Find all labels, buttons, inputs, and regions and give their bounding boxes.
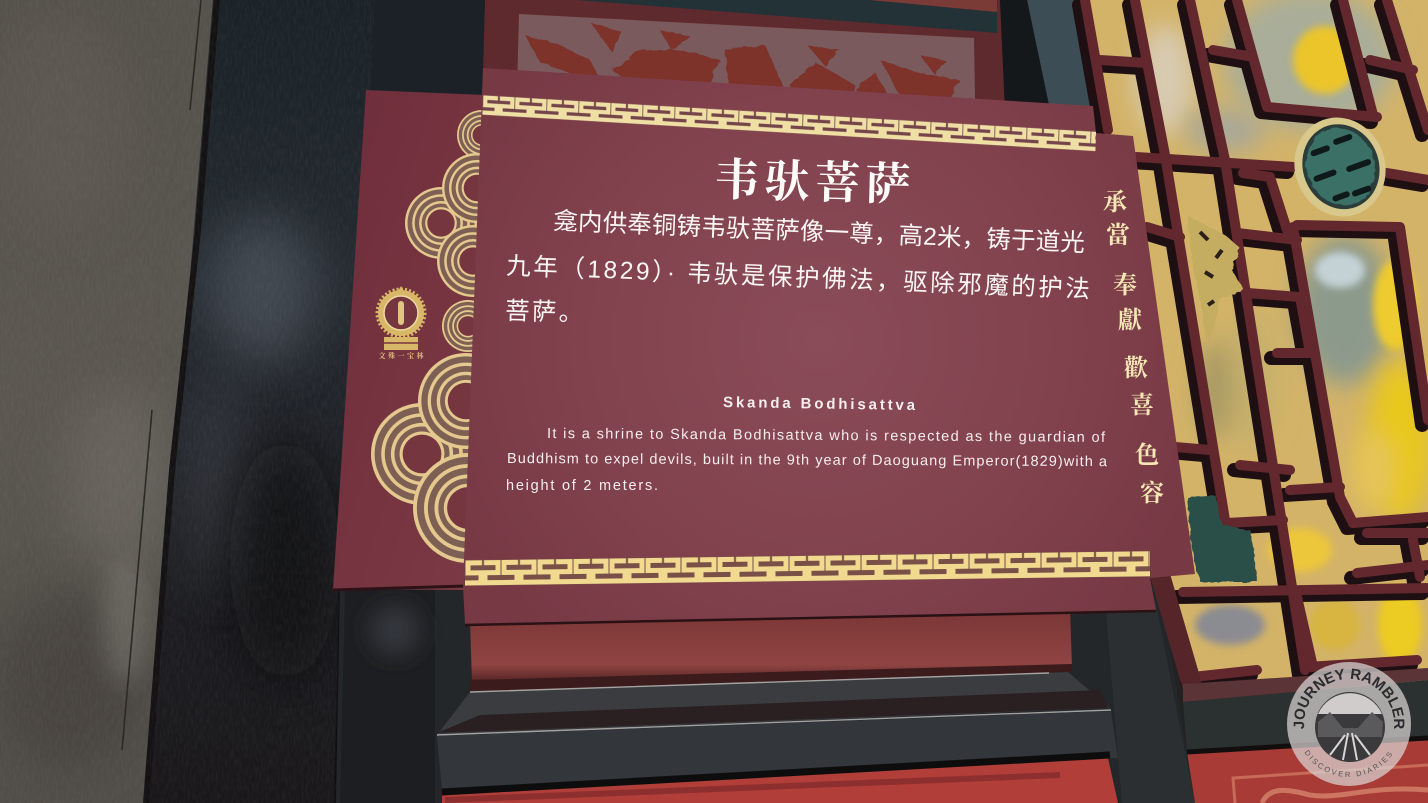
vertical gold inscription: 歡 [1124, 355, 1148, 382]
gold carving [1187, 215, 1244, 340]
vertical gold inscription: 色 [1135, 442, 1159, 469]
window sill and lower right panel [1183, 668, 1428, 803]
vertical gold inscription: 承 [1103, 189, 1127, 216]
vertical gold inscription [1103, 189, 1164, 507]
watermark: Journey Rambler [1287, 662, 1411, 786]
vertical gold inscription: 當 [1106, 222, 1130, 249]
concrete wall [0, 0, 215, 803]
lower red door panel [442, 758, 1118, 803]
logo emblem: 文殊一宝林 [378, 351, 424, 360]
vertical gold inscription: 奉 [1113, 272, 1137, 299]
English body text: It is a shrine to Skanda Bodhisattva who is respected as the guardian of [547, 426, 1106, 446]
right door stile [1105, 600, 1195, 803]
vertical gold inscription: 容 [1140, 479, 1164, 507]
wall and pillar texture [0, 0, 380, 803]
lattice window background [1085, 0, 1428, 690]
English heading: Skanda Bodhisattva [723, 394, 916, 414]
Chinese body text: 菩萨。 [505, 297, 584, 327]
front sign panel [463, 68, 1195, 625]
lattice bars [1079, 0, 1428, 685]
Chinese body text: 九年（1829）· 韦驮是保护佛法，驱除邪魔的护法 [506, 252, 1090, 303]
black lacquer door pillar [146, 0, 490, 803]
bottom meander border [465, 551, 1150, 586]
upper door frame [370, 0, 1094, 110]
upper red door panel [470, 607, 1072, 684]
watermark tagline: DISCOVER DIARIES [1304, 750, 1392, 777]
top meander border [482, 95, 1096, 151]
vertical gold inscription: 獻 [1118, 307, 1143, 334]
English body text: height of 2 meters. [506, 478, 658, 494]
English body text [506, 426, 1108, 494]
vertical gold inscription: 喜 [1130, 392, 1154, 419]
watermark emblem [1315, 692, 1385, 762]
logo emblem [378, 286, 424, 360]
watermark title: JOURNEY RAMBLER [1294, 668, 1404, 729]
carved relief panel [517, 14, 975, 108]
lower door panels [336, 585, 1195, 803]
Chinese body text [505, 207, 1090, 327]
English body text: Buddhism to expel devils, built in the 9th year of Daoguang Emperor(1829)with a [507, 451, 1108, 470]
Chinese body text: 龛内供奉铜铸韦驮菩萨像一尊，高2米，铸于道光 [553, 207, 1085, 257]
jade medallion [1281, 105, 1399, 229]
rear sign panel [333, 90, 523, 590]
scallop wave pattern [371, 110, 523, 563]
green carving [1187, 495, 1258, 582]
title: 韦驮菩萨 [714, 155, 911, 210]
